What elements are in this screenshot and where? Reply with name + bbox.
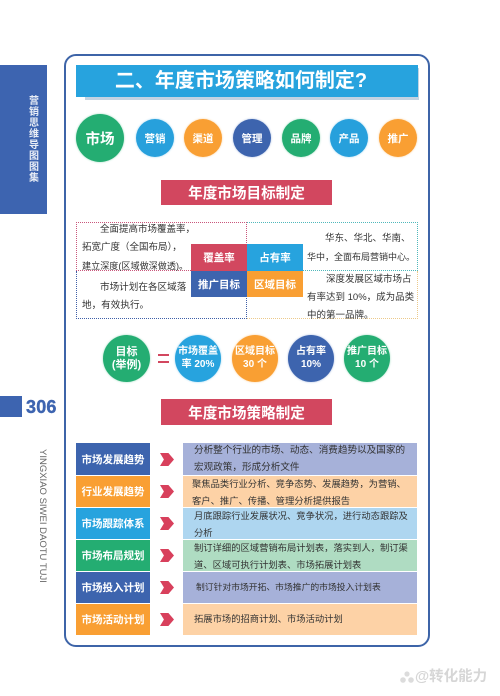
strategy row 5: [76, 572, 417, 603]
circle: market: [76, 114, 124, 162]
label: market layout: 市场布局规划: [82, 550, 144, 562]
equals sign: [158, 354, 169, 363]
vertical pinyin text: YINGXIAO SIWEI DAOTU TUJI: [37, 449, 48, 583]
circle: management: [233, 119, 271, 157]
label: market trend: 市场发展趋势: [82, 454, 144, 466]
label: regional goal: [247, 271, 303, 297]
circle: market: 市场: [86, 132, 114, 148]
circle: product: 产品: [338, 132, 360, 144]
description 4: 道、区域可执行计划表、市场拓展计划表: [194, 560, 361, 570]
text: promotion goal: 市场计划在各区域落: [100, 282, 186, 293]
circle: coverage 20%: 率 20%: [182, 358, 214, 370]
label: market tracking: 市场跟踪体系: [82, 518, 144, 530]
text: regional goal: 有率达到 10%，成为品类: [307, 292, 414, 303]
side tab: [0, 65, 47, 214]
circle: share 10%: 占有率: [296, 346, 326, 357]
circle: promotion: [379, 119, 417, 157]
circle: share 10%: 10%: [301, 358, 321, 370]
text: coverage: [82, 224, 195, 271]
watermark: [400, 668, 487, 685]
label: market tracking: [76, 508, 150, 539]
description 2: 客户、推广、传播、管理分析提供报告: [192, 496, 350, 506]
text: share: 华中，全面布局营销中心。: [307, 252, 415, 262]
label: promotion goal: 推广目标: [198, 278, 240, 290]
description 4: [183, 540, 417, 571]
circle: brand: 品牌: [290, 132, 312, 144]
text: coverage: 建立深度(区域做深做透)。: [82, 261, 188, 271]
circle: channel: [184, 119, 222, 157]
circle: promotion 10: 推广目标: [347, 346, 387, 357]
text: share: [307, 232, 415, 262]
description 4: 制订详细的区域营销布局计划表，落实到人，制订渠: [194, 543, 408, 553]
title bar: 二、年度市场策略如何制定?: [115, 70, 367, 92]
circle: goal example: [103, 335, 150, 382]
label: market investment: [76, 572, 150, 603]
circle: goal example: (举例): [112, 358, 141, 370]
circle: marketing: [136, 119, 174, 157]
arrow 2: [160, 485, 174, 498]
strategy row 6: [76, 604, 417, 635]
description 3: [183, 508, 417, 539]
label: coverage: [191, 244, 247, 271]
label: regional goal: 区域目标: [254, 278, 296, 290]
circle: marketing: 营销: [144, 132, 166, 144]
description 1: 分析整个行业的市场、动态、消费趋势以及国家的: [194, 445, 405, 456]
arrow 5: [160, 581, 174, 594]
title bar: [76, 65, 419, 100]
page number block: [0, 396, 22, 417]
side tab text: 营销思维导图图集: [29, 96, 39, 184]
description 2: 聚焦品类行业分析、竞争态势、发展趋势，为营销、: [192, 479, 406, 489]
circle: share 10%: [288, 335, 334, 382]
description 1: [183, 443, 417, 475]
text: promotion goal: 地，有效执行。: [82, 300, 149, 310]
circle: coverage 20%: [175, 335, 221, 382]
equation row: [102, 334, 392, 384]
heading: annual market strategy: 年度市场策略制定: [188, 406, 305, 422]
strategy row 2: [76, 476, 417, 507]
circle: regions 30: 30 个: [243, 358, 267, 370]
description 5: [183, 572, 417, 603]
arrow 4: [160, 549, 174, 562]
arrow 6: [160, 613, 174, 626]
label: market activity: [76, 604, 150, 635]
description 2: [183, 476, 417, 507]
label: industry trend: [76, 476, 150, 507]
strategy row 3: [76, 508, 417, 539]
circle: goal example: 目标: [115, 346, 137, 358]
text: regional goal: [307, 274, 414, 321]
heading: annual market goals: [161, 180, 332, 205]
text: regional goal: 深度发展区域市场占: [326, 274, 412, 285]
circle: regions 30: 区域目标: [235, 346, 275, 357]
text: regional goal: 中的第一品牌。: [307, 310, 374, 321]
strategy row 1: [76, 443, 417, 475]
circle: channel: 渠道: [192, 132, 214, 144]
heading: annual market strategy: [161, 399, 332, 425]
description 5: 制订针对市场开拓、市场推广的市场投入计划表: [196, 582, 381, 592]
label: industry trend: 行业发展趋势: [82, 486, 144, 498]
text: coverage: 全面提高市场覆盖率，: [100, 224, 195, 235]
circle: regions 30: [232, 335, 278, 382]
text: promotion goal: [82, 282, 186, 310]
circle: product: [330, 119, 368, 157]
label: market activity: 市场活动计划: [82, 614, 144, 626]
circle: promotion 10: [344, 335, 390, 382]
watermark icon: [400, 672, 414, 683]
circle: promotion: 推广: [388, 132, 408, 144]
text: share: 华东、华北、华南、: [325, 233, 411, 244]
label: market trend: [76, 443, 150, 475]
circle: coverage 20%: 市场覆盖: [178, 346, 218, 357]
label: market investment: 市场投入计划: [82, 582, 144, 594]
description 1: 宏观政策，形成分析文件: [194, 462, 300, 472]
dotted quadrants: [76, 222, 247, 271]
text: coverage: 拓宽广度（全国布局），: [82, 242, 182, 253]
label: market layout: [76, 540, 150, 571]
arrow 1: [160, 453, 174, 466]
label: share: 占有率: [259, 252, 291, 264]
page number: 306: [26, 397, 57, 417]
label: promotion goal: [191, 271, 247, 297]
goals matrix: [76, 222, 418, 321]
arrow 3: [160, 517, 174, 530]
description 6: 拓展市场的招商计划、市场活动计划: [194, 614, 343, 624]
description 3: 分析: [194, 528, 213, 538]
label: share: [247, 244, 303, 271]
heading: annual market goals: 年度市场目标制定: [188, 186, 305, 202]
description 6: [183, 604, 417, 635]
circle: promotion 10: 10 个: [355, 358, 379, 370]
circle row: topics: [74, 112, 418, 164]
strategy row 4: [76, 540, 417, 571]
main frame: [64, 54, 430, 647]
label: coverage: 覆盖率: [203, 252, 235, 264]
circle: brand: [282, 119, 320, 157]
description 3: 月底跟踪行业发展状况、竞争状况，进行动态跟踪及: [194, 511, 408, 521]
circle: management: 管理: [242, 132, 262, 144]
watermark text: @转化能力: [415, 669, 487, 685]
